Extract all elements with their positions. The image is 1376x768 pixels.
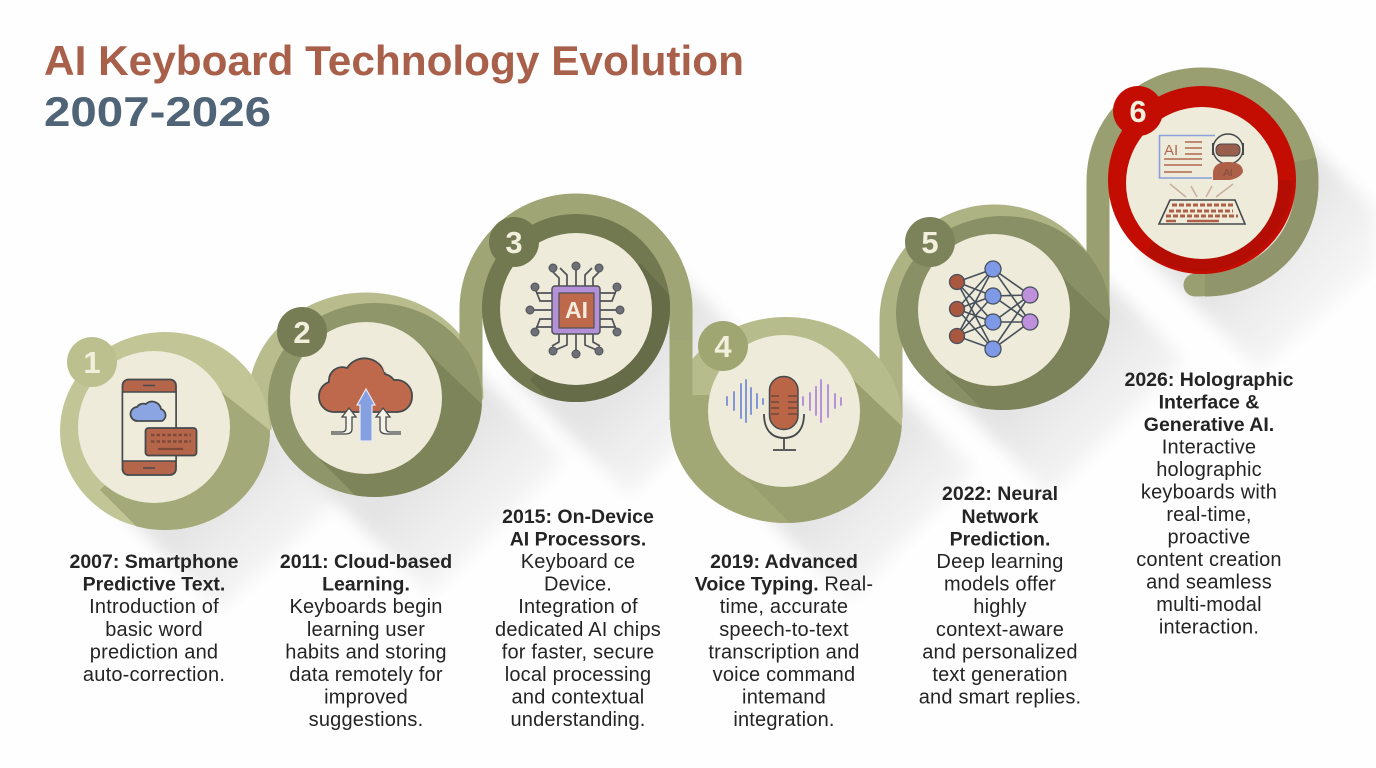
text block: 2015: and contextual	[512, 686, 644, 708]
icon: hologram screen, robot and keyboard: AI	[1223, 168, 1233, 179]
text block: 2011: improved	[324, 686, 408, 708]
step 2: cloud-based learning	[268, 303, 482, 497]
step 3: on-device AI processors	[482, 214, 670, 402]
badge 5: 5	[921, 225, 939, 260]
text block: 2026: proactive	[1168, 526, 1250, 548]
badge 4	[698, 321, 748, 371]
text block: 2015: for faster, secure	[502, 642, 654, 664]
text block: 2019: Voice Typing. Real-	[695, 574, 873, 596]
text block: 2007: prediction and	[90, 642, 218, 664]
text block: 2022: Prediction.	[950, 528, 1050, 550]
long cast shadows	[100, 110, 1376, 610]
text block: 2026: interaction.	[1159, 616, 1259, 638]
text block: 2026: and seamless	[1146, 572, 1272, 594]
step 1: smartphone predictive text	[60, 332, 270, 530]
icon: phone with cloud and keyboard	[122, 380, 196, 475]
text block: 2019: integration.	[733, 709, 835, 731]
text block: 2007: Introduction of	[89, 596, 219, 618]
text block: 2026: Interface &	[1159, 392, 1259, 414]
text block: 2026: holographic	[1156, 459, 1262, 481]
icon: AI chip	[526, 262, 624, 358]
text block: 2019: speech-to-text	[719, 619, 849, 641]
badge 5	[905, 217, 955, 267]
text block: 2022: and smart replies.	[919, 686, 1081, 708]
text block: 2022: Network	[962, 506, 1039, 528]
text block: 2011: learning user	[307, 619, 425, 641]
badge 1	[67, 337, 117, 387]
text block: 2015: local processing	[505, 664, 651, 686]
text block: 2022: context-aware	[936, 619, 1064, 641]
icon: cloud upload	[319, 358, 412, 441]
text block: 2026: Interactive	[1162, 436, 1256, 458]
icon: microphone with sound waves	[727, 376, 841, 450]
icon: AI chip: AI	[565, 297, 588, 323]
text block: 2022: highly	[973, 596, 1027, 618]
step 5: neural network prediction	[896, 216, 1110, 410]
text block: 2015: understanding.	[510, 709, 646, 731]
badge 2	[277, 307, 327, 357]
text block: 2026: Generative AI.	[1144, 414, 1274, 436]
text block: 2019: transcription and	[708, 642, 860, 664]
text block: 2019: time, accurate	[720, 596, 848, 618]
icon: hologram screen, robot and keyboard: AI	[1164, 142, 1178, 159]
text block: 2022: Deep learning	[936, 551, 1064, 573]
text block: 2011: Keyboards begin	[289, 596, 443, 618]
text block: 2022: and personalized	[922, 642, 1078, 664]
text block: 2022: text generation	[932, 664, 1068, 686]
text block: 2011: Learning.	[322, 574, 410, 596]
icon: neural network	[950, 261, 1038, 357]
text block: 2019: 2019: Advanced	[710, 551, 858, 573]
text block: 2007: 2007: Smartphone	[69, 551, 239, 573]
text block: 2019: intemand	[742, 686, 826, 708]
timeline ribbon	[260, 79, 1307, 430]
title: AI Keyboard Technology Evolution	[44, 37, 744, 84]
text block: 2011: habits and storing	[285, 642, 447, 664]
badge 3	[489, 217, 539, 267]
text block: 2015: dedicated AI chips	[495, 619, 661, 641]
text block: 2026: multi-modal	[1156, 594, 1262, 616]
title: 2007-2026	[44, 88, 271, 135]
badge 6	[1113, 86, 1163, 136]
text block: 2015: AI Processors.	[510, 528, 646, 550]
text block: 2019: voice command	[713, 664, 855, 686]
text block: 2022: models offer	[944, 574, 1056, 596]
icon: hologram screen, robot and keyboard	[1159, 134, 1245, 224]
text block: 2026: content creation	[1136, 549, 1282, 571]
badge 1: 1	[83, 345, 101, 380]
text block: 2015: Keyboard ce	[521, 551, 635, 573]
text block: 2011: data remotely for	[289, 664, 443, 686]
text block: 2015: 2015: On-Device	[502, 506, 654, 528]
step 4: advanced voice typing	[670, 317, 902, 523]
badge 4: 4	[714, 329, 732, 364]
text block: 2026: keyboards with	[1141, 482, 1277, 504]
step 6: holographic interface and generative AI	[1108, 86, 1296, 274]
badge 2: 2	[293, 315, 311, 350]
title	[44, 37, 744, 135]
badge 3: 3	[505, 225, 523, 260]
text block: 2011: 2011: Cloud-based	[280, 551, 452, 573]
text block: 2015: Integration of	[518, 596, 638, 618]
text block: 2022: 2022: Neural	[942, 483, 1058, 505]
badge 6: 6	[1129, 94, 1147, 129]
text block: 2011: suggestions.	[309, 709, 423, 731]
text block: 2015: Device.	[544, 574, 612, 596]
text block: 2026: real-time,	[1166, 504, 1252, 526]
text block: 2026: 2026: Holographic	[1124, 369, 1294, 391]
text block: 2007: Predictive Text.	[83, 574, 225, 596]
text block: 2007: auto-correction.	[83, 664, 225, 686]
text block: 2007: basic word	[105, 619, 203, 641]
